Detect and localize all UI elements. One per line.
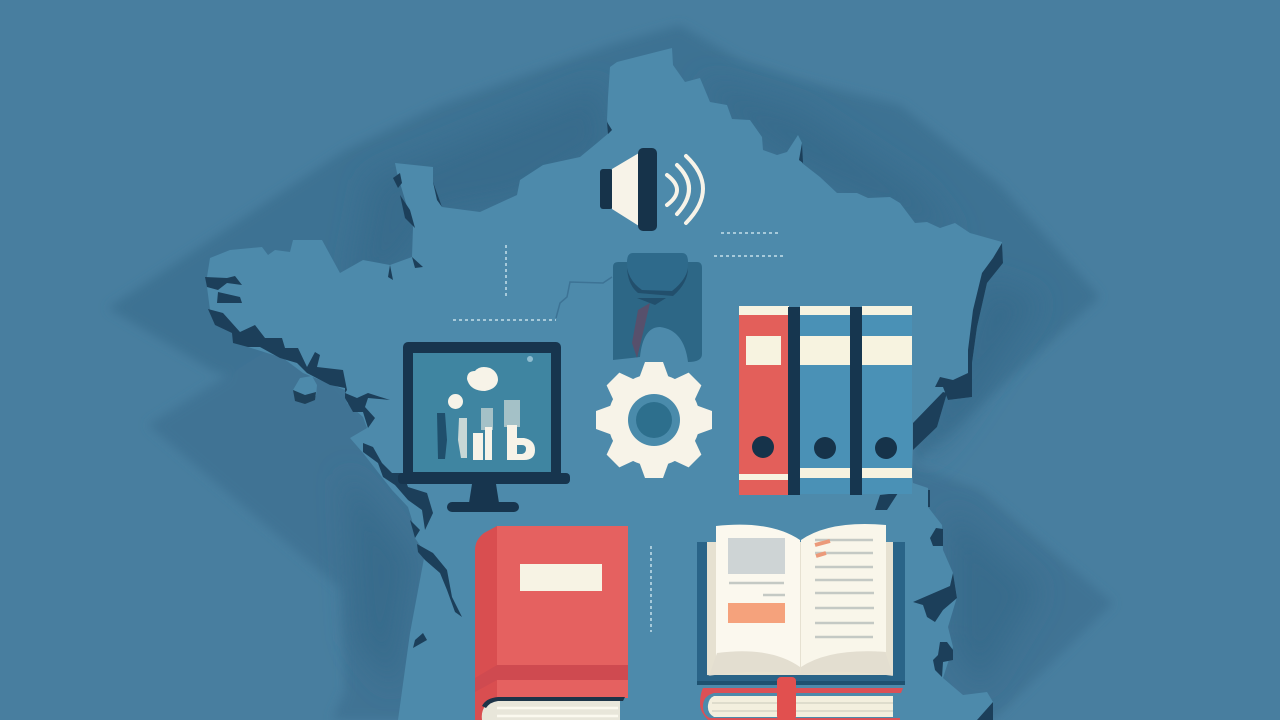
icon: dark blue figure	[556, 253, 702, 362]
icon: computer monitor	[398, 342, 570, 512]
icon: binders	[739, 306, 912, 495]
icon: open book	[697, 524, 905, 720]
coastline shadows	[205, 122, 1003, 720]
icon: speaker	[600, 148, 703, 231]
France map silhouette	[207, 48, 1003, 720]
inner darker shadow	[345, 80, 1040, 690]
screen content	[448, 367, 535, 460]
island	[293, 376, 317, 396]
dashed lines	[453, 233, 783, 632]
icon: gear	[596, 362, 712, 478]
icon: closed red book	[475, 526, 628, 720]
map shadow	[108, 25, 1113, 720]
